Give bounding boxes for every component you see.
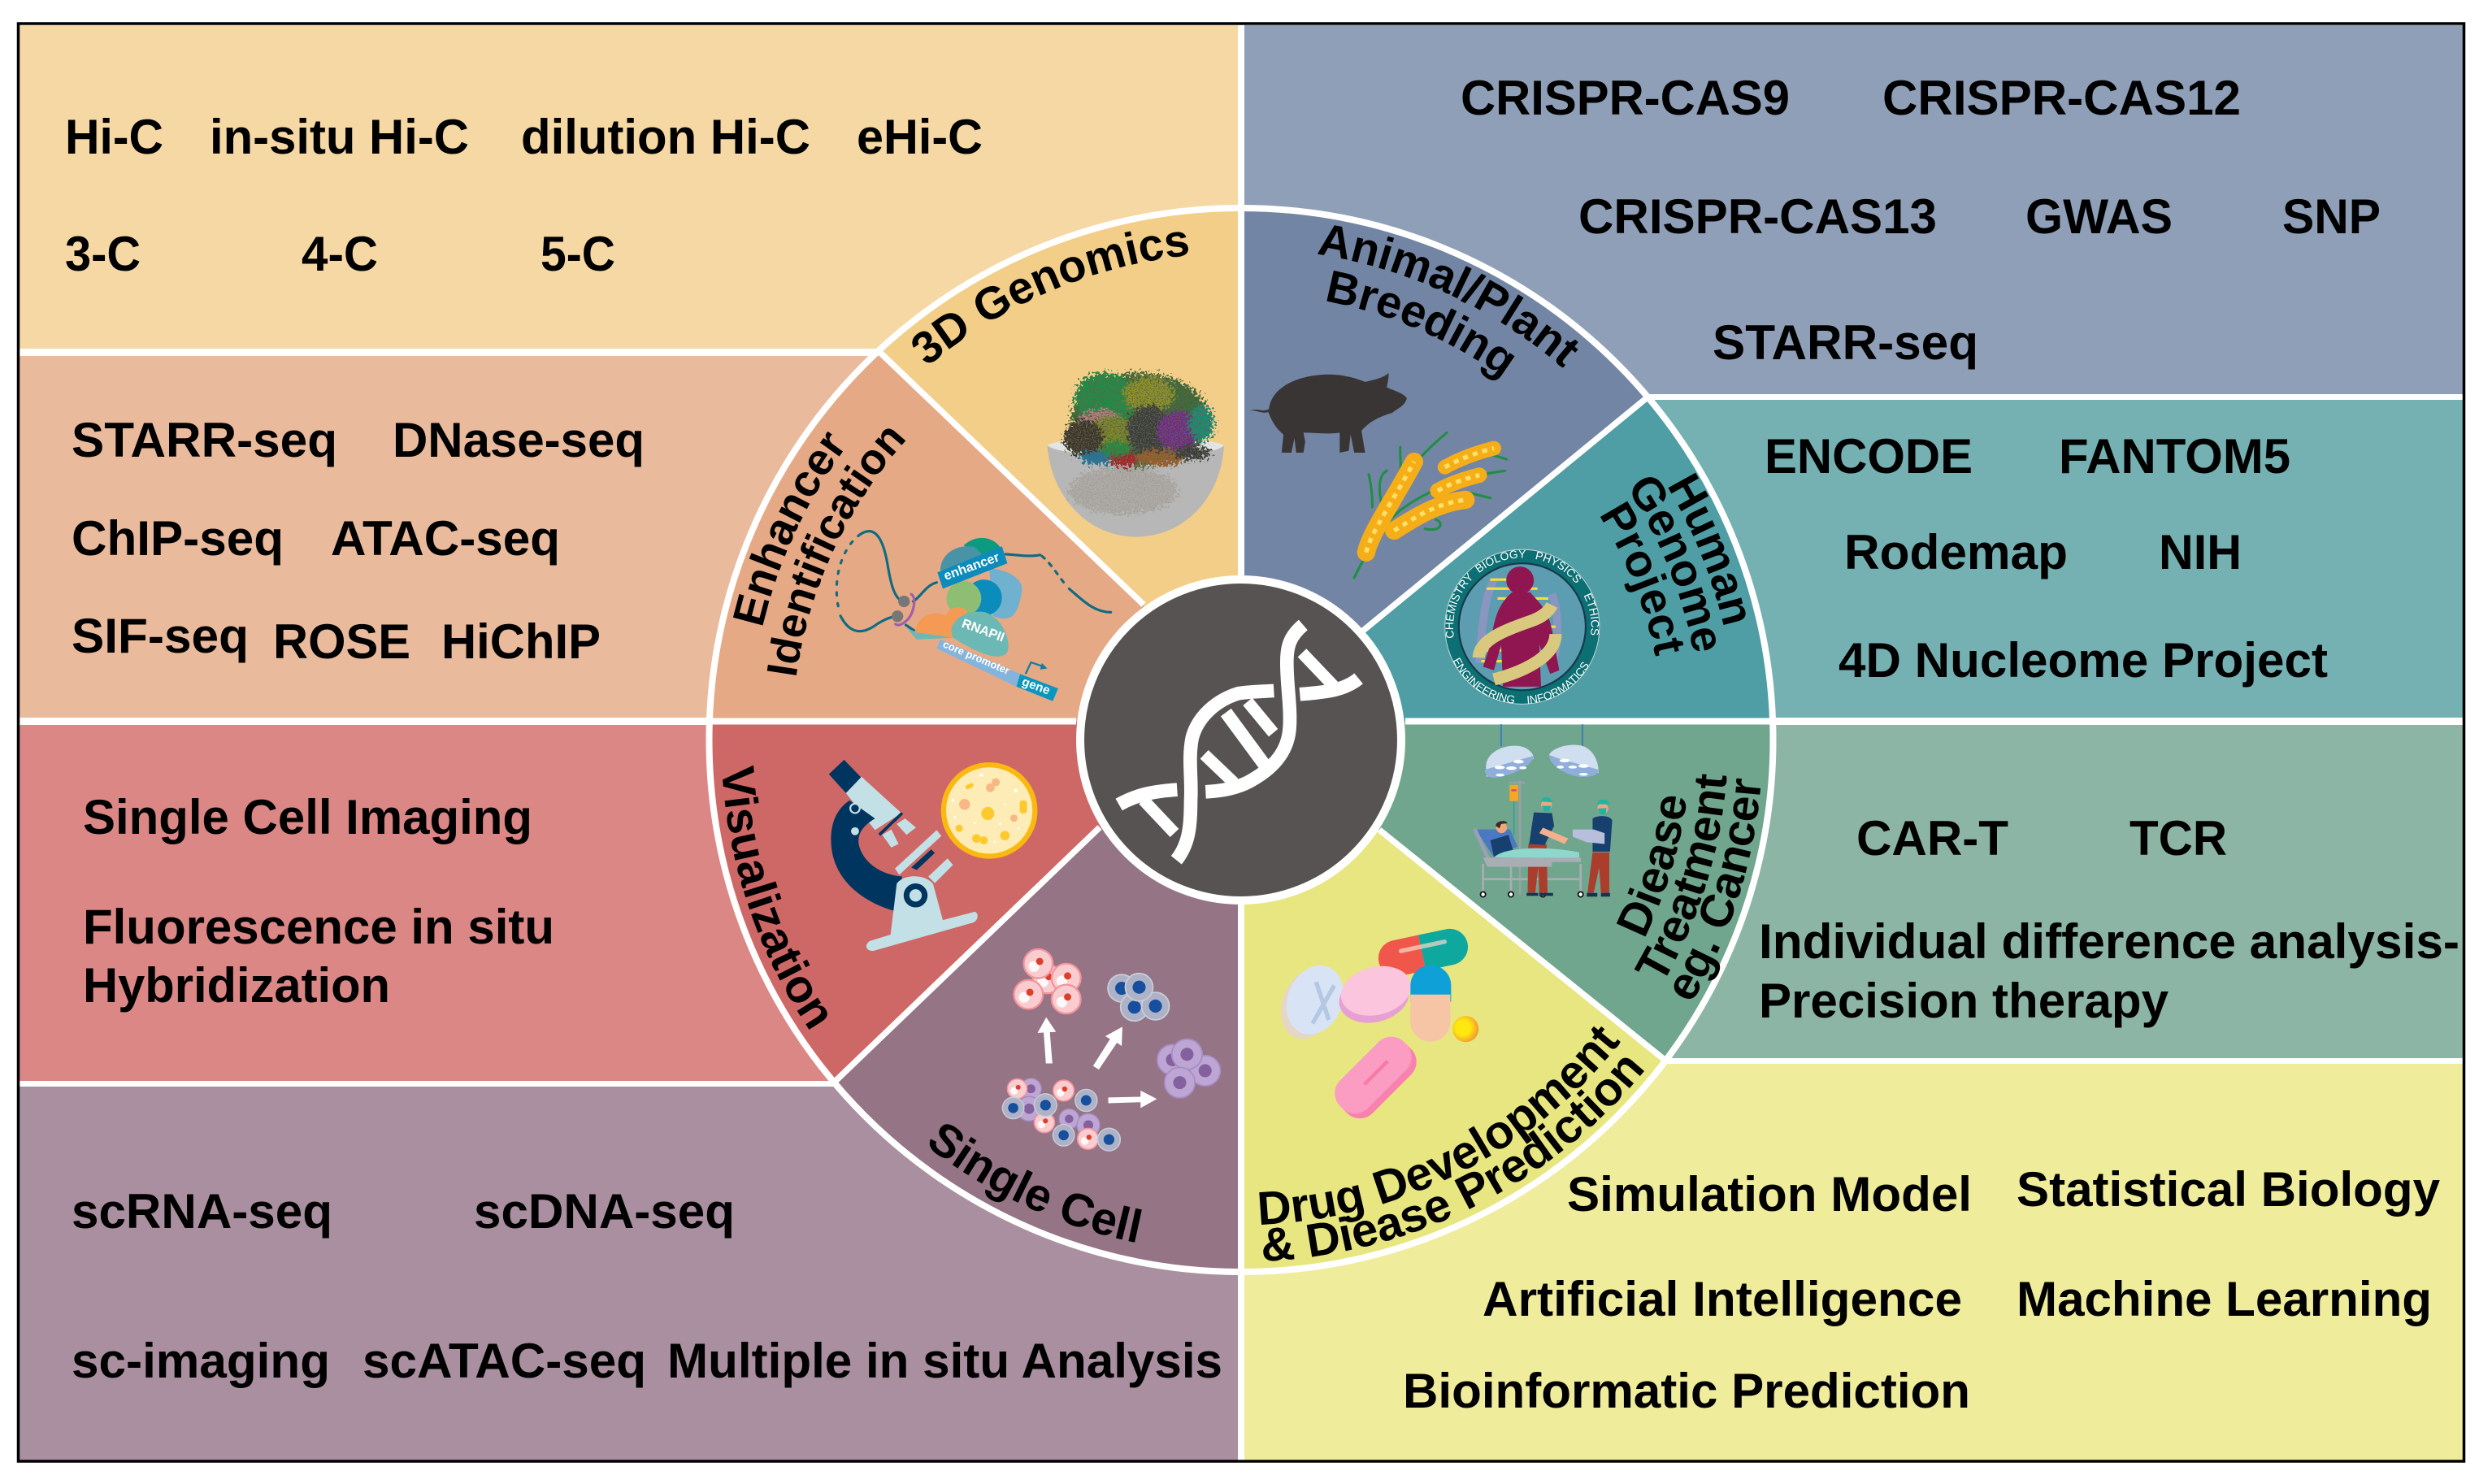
method list: breeding: SNP <box>2282 189 2381 244</box>
icon: enhancer-promoter diagram: core promoter <box>941 638 1012 677</box>
icon: enhancer-promoter diagram: enhancer <box>942 549 1001 584</box>
method list: enhancer: SIF-seq <box>72 609 249 663</box>
method list: breeding: STARR-seq <box>1713 315 1978 370</box>
approach list: Individual difference analysis- <box>1759 914 2459 969</box>
approach list: CAR-T <box>1856 811 2008 866</box>
method list: breeding: CRISPR-CAS12 <box>1882 71 2241 125</box>
method list: single cell: scRNA-seq <box>72 1184 332 1239</box>
icon: enhancer-promoter diagram: RNAPII <box>960 616 1006 645</box>
method list: enhancer: DNase-seq <box>393 413 645 467</box>
sector label: Single Cell: Single Cell <box>930 1124 1142 1243</box>
icon: Human Genome Project logo: CHEMISTRY <box>1445 572 1471 638</box>
method list: 3D genomics: 3-C <box>65 227 141 281</box>
method list: single cell: sc-imaging <box>72 1334 330 1388</box>
method list: breeding: GWAS <box>2025 189 2173 244</box>
icon: Human Genome Project logo: ENGINEERING <box>1453 657 1515 704</box>
method list: breeding: CRISPR-CAS9 <box>1461 71 1790 125</box>
resource list: FANTOM5 <box>2059 429 2290 484</box>
icon: petri dish <box>944 765 1035 857</box>
sector label: Animal/Plant Breeding: Animal/Plant <box>1317 225 1578 367</box>
icon: surgery scene <box>1473 724 1613 897</box>
sector label: Visualization: Visualization <box>723 766 827 1030</box>
approach list: Precision therapy <box>1759 974 2169 1028</box>
method list: visualization: Fluorescence in situ <box>83 900 554 954</box>
sector: Human Genome Project <box>1241 398 1773 740</box>
method list: visualization: Single Cell Imaging <box>83 790 532 844</box>
sector: Drug Development <box>1241 740 1665 1272</box>
sector: Single Cell <box>835 740 1241 1272</box>
sector label: Human Genome Project: Genome <box>1632 477 1716 652</box>
sector label: 3D Genomics: 3D Genomics <box>912 231 1188 362</box>
panel: Visualization methods <box>20 725 1092 1081</box>
method list: enhancer: ChIP-seq <box>72 511 284 566</box>
sector: Visualization <box>710 722 1241 1082</box>
method list: 3D genomics: 5-C <box>541 227 615 281</box>
method list: single cell: Multiple in situ Analysis <box>667 1334 1222 1388</box>
sector label: Animal/Plant Breeding: Breeding <box>1326 270 1515 380</box>
method list: breeding <box>1461 71 2381 370</box>
method list: enhancer: ROSE <box>273 614 410 669</box>
method list: enhancer: HiChIP <box>441 614 601 669</box>
method list: drug development: Statistical Biology <box>2017 1162 2441 1217</box>
approach list: TCR <box>2129 811 2227 866</box>
method list: drug development: Bioinformatic Prediction <box>1403 1364 1970 1418</box>
sector label: Disease Treatment: eg. Cancer <box>1674 779 1760 999</box>
icon: Human Genome Project logo: ETHICS <box>1583 593 1600 636</box>
pink cell cluster <box>1014 949 1081 1013</box>
panel: Drug Development methods <box>1244 1064 2463 1460</box>
method list: 3D genomics: dilution Hi-C <box>521 110 810 164</box>
sector label: Disease Treatment: Treatment <box>1634 774 1726 975</box>
method list: single cell: scATAC-seq <box>363 1334 646 1388</box>
sector: Animal/Plant Breeding <box>1241 208 1647 740</box>
method list: visualization: Hybridization <box>83 958 390 1013</box>
sector label: Human Genome Project: Project <box>1600 501 1684 657</box>
sector label: Human Genome Project: Human <box>1668 473 1746 625</box>
icon: pills and capsules <box>1271 926 1478 1126</box>
method list: single cell <box>72 1184 1222 1388</box>
icon: microscope <box>829 760 978 951</box>
panel: Human Genome Project resources <box>1617 400 2463 718</box>
resource list: ENCODE <box>1765 429 1973 484</box>
sector label: Disease Treatment: Diease <box>1616 796 1686 936</box>
sector: Disease Treatment <box>1241 722 1773 1060</box>
icon: rice ears <box>1354 432 1507 578</box>
sector label: Drug Development: & Diease Prediction <box>1263 1058 1644 1261</box>
arrows <box>1037 1018 1157 1108</box>
method list: 3D genomics: Hi-C <box>65 110 163 164</box>
method list: visualization <box>83 790 554 1013</box>
icon: DNA double helix <box>1119 625 1359 860</box>
sector: 3D Genomics <box>879 208 1241 740</box>
purple cell cluster <box>1157 1039 1220 1098</box>
method list: 3D genomics <box>65 110 983 281</box>
sector label: Enhancer Identification: Identification <box>767 428 905 675</box>
resource list: Rodemap <box>1844 525 2068 579</box>
sector: Enhancer Identification <box>710 351 1241 740</box>
method list: enhancer: STARR-seq <box>72 413 337 467</box>
icon: Human Genome Project logo: BIOLOGY <box>1474 549 1526 573</box>
resource list: NIH <box>2159 525 2242 579</box>
panel: Enhancer Identification methods <box>20 356 1092 718</box>
panel: 3D Genomics methods <box>20 25 1238 349</box>
resource list: 4D Nucleome Project <box>1839 633 2328 688</box>
panel: Single Cell methods <box>20 1087 1238 1460</box>
method list: 3D genomics: eHi-C <box>857 110 983 164</box>
icon: pig <box>1249 373 1407 453</box>
wheel <box>709 208 1773 1272</box>
icon: enhancer-promoter diagram <box>836 532 1111 701</box>
method list: single cell: scDNA-seq <box>474 1184 735 1239</box>
method list: breeding: CRISPR-CAS13 <box>1578 189 1937 244</box>
blue cell cluster <box>1108 974 1170 1021</box>
outer ring and spokes <box>709 208 1773 1272</box>
approach list <box>1759 811 2459 1028</box>
method list: 3D genomics: in-situ Hi-C <box>210 110 469 164</box>
hub: DNA emblem <box>1080 579 1401 900</box>
icon: Human Genome Project logo: INFORMATICS <box>1527 662 1588 704</box>
icon: cell differentiation <box>1002 949 1220 1151</box>
panel: Disease Treatment approaches <box>1617 725 2463 1058</box>
icon: Human Genome Project logo: PHYSICS <box>1535 551 1581 583</box>
sector label: Drug Development: Drug Development <box>1259 1026 1621 1225</box>
method list: drug development: Artificial Intelligence <box>1483 1272 1962 1326</box>
method list: drug development: Machine Learning <box>2017 1272 2432 1326</box>
icon: Human Genome Project logo <box>1403 549 1600 748</box>
method list: enhancer: ATAC-seq <box>331 511 560 566</box>
icon: chromatin in bowl <box>1048 373 1224 537</box>
method list: 3D genomics: 4-C <box>302 227 378 281</box>
sector label: Enhancer Identification: Enhancer <box>733 432 843 626</box>
method list: drug development: Simulation Model <box>1567 1167 1972 1221</box>
method list: enhancer <box>72 413 645 669</box>
method list: drug development <box>1403 1162 2441 1418</box>
icon: enhancer-promoter diagram: gene <box>1020 675 1052 697</box>
mixed cell population <box>1002 1078 1120 1151</box>
resource list <box>1765 429 2328 688</box>
panel: Animal/Plant Breeding methods <box>1244 25 2463 394</box>
